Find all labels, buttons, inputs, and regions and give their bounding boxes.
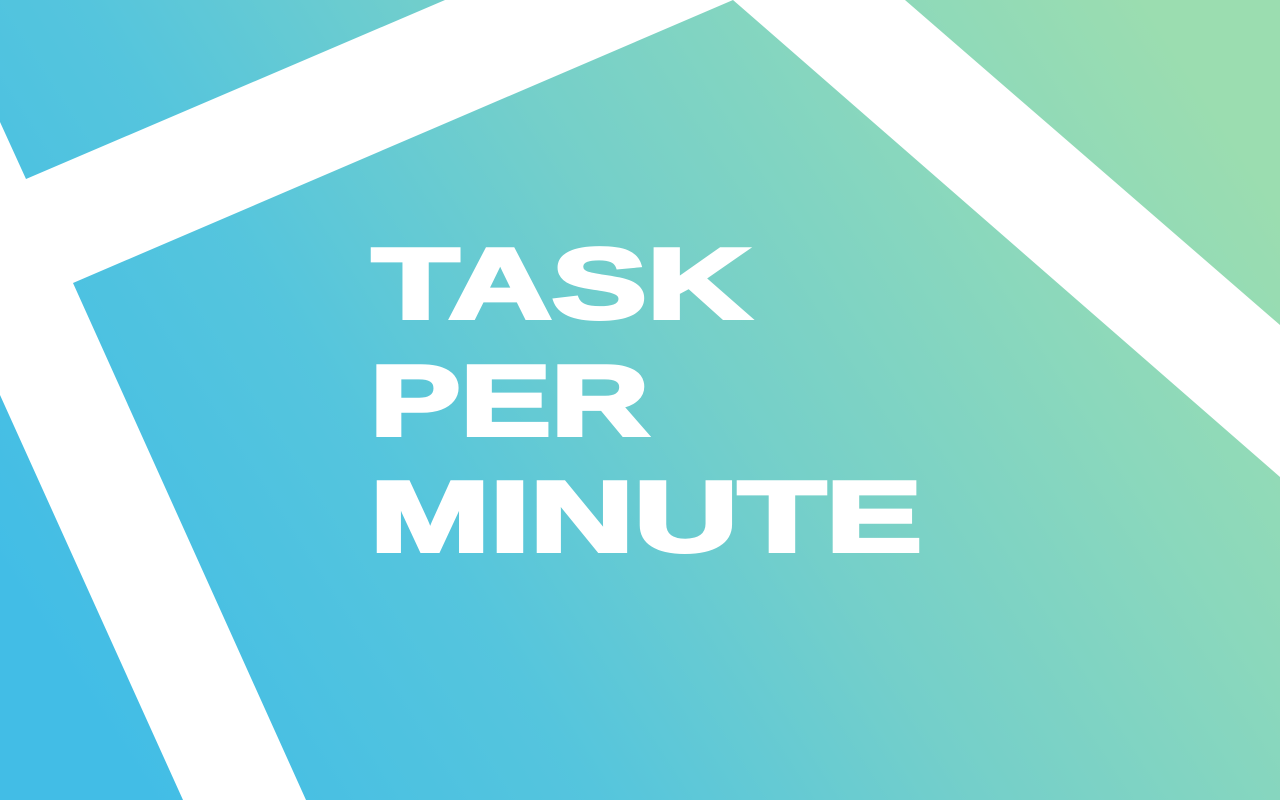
title line: TASK: TASK bbox=[372, 228, 750, 340]
title line: PER: PER bbox=[370, 345, 649, 457]
title: Task Per Minute bbox=[370, 228, 922, 573]
title line: MINUTE: MINUTE bbox=[370, 461, 922, 573]
